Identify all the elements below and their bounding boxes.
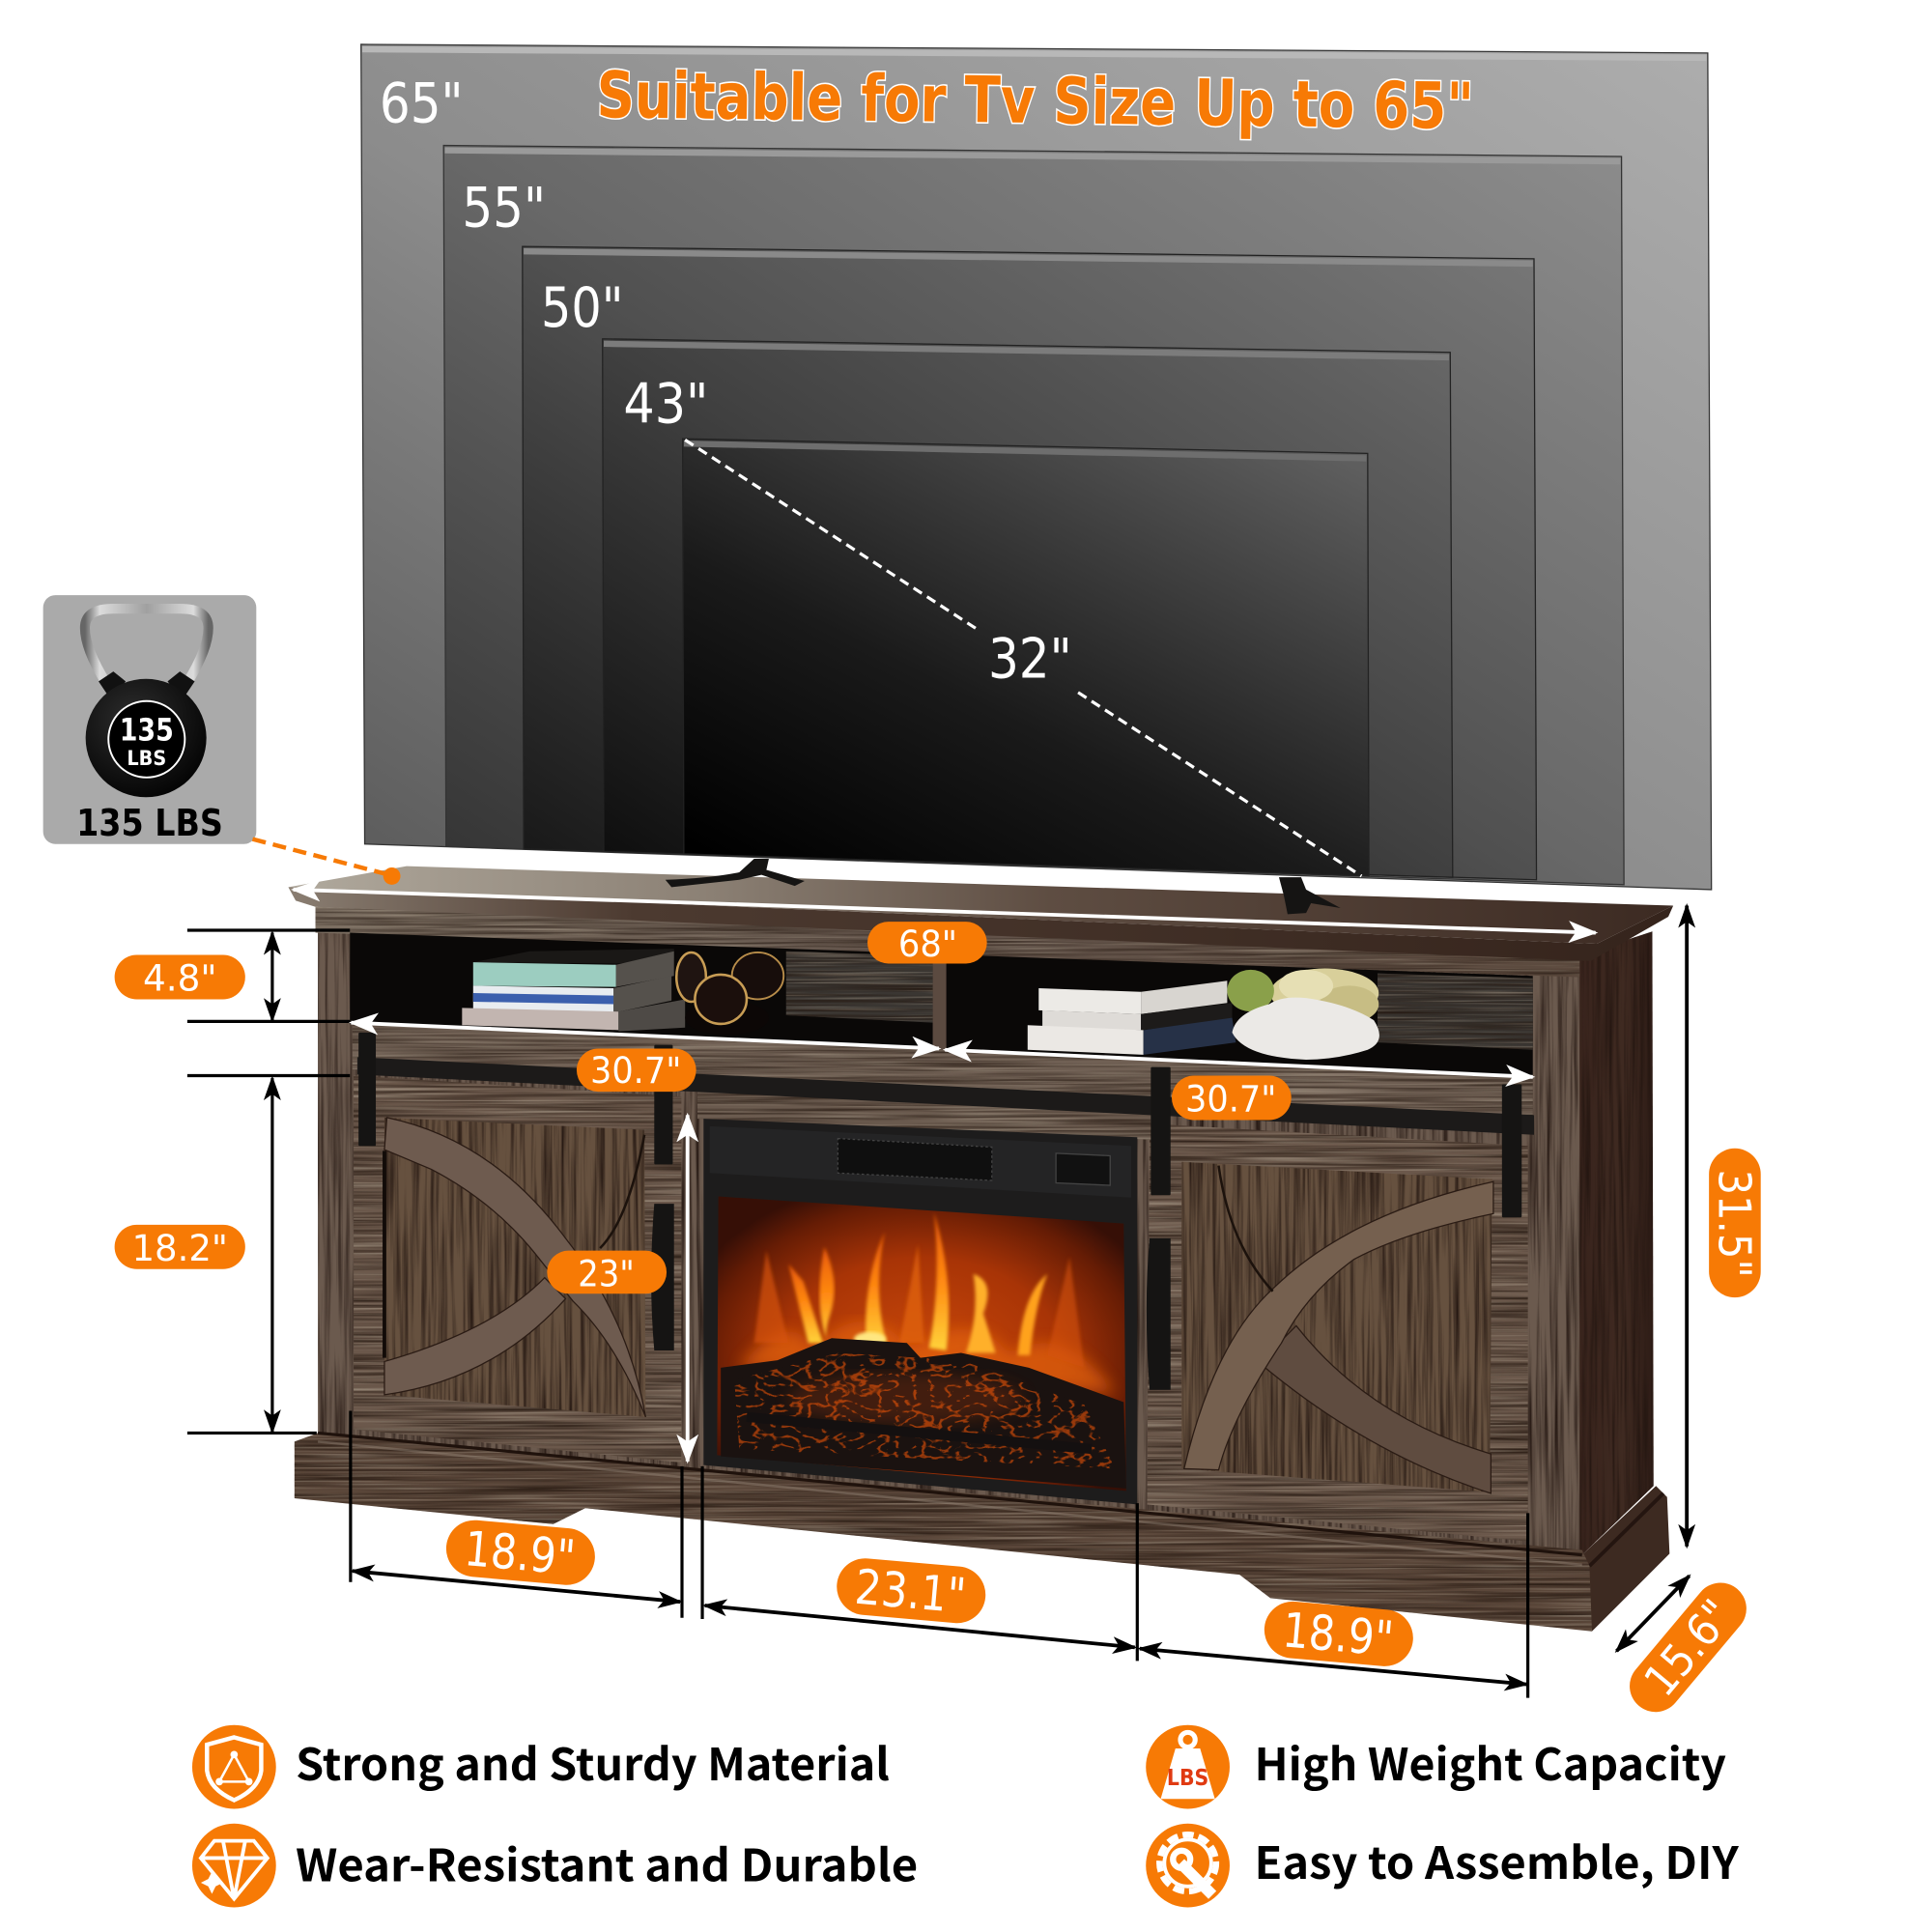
left barn door — [354, 1076, 681, 1463]
badge: 23.1 in: 23.1" — [853, 1559, 968, 1624]
door X brace — [384, 1118, 645, 1417]
32 inch label: 32" — [988, 627, 1072, 692]
card caption: 135 LBS — [76, 802, 223, 845]
TV stand cabinet — [288, 859, 1673, 1632]
right foot — [1279, 877, 1341, 914]
badge: right 18.9 in: 18.9" — [1280, 1602, 1396, 1667]
top surface — [288, 867, 1673, 944]
badge unit: LBS — [127, 747, 166, 771]
shelf opening — [350, 933, 1533, 1076]
flowers — [1270, 969, 1378, 1018]
feature text: wear resistant: Wear-Resistant and Durable — [296, 1832, 918, 1895]
vase — [1233, 998, 1379, 1060]
door frame — [354, 1076, 681, 1463]
door panel — [384, 1118, 645, 1417]
depth arrow — [1616, 1576, 1690, 1651]
base side — [1582, 1486, 1669, 1632]
sliding door rail — [357, 1057, 1534, 1135]
strap brackets — [358, 1033, 376, 1146]
fireplace frame — [703, 1119, 1137, 1504]
icon: weight — [1146, 1725, 1230, 1808]
title: Suitable for Tv Size Up to 65" — [596, 57, 1474, 144]
right door width arrow — [1140, 1649, 1526, 1685]
side panel — [1577, 931, 1654, 1555]
shelf back wall grain left — [786, 952, 933, 1023]
base front — [295, 1433, 1592, 1632]
badge: 15.6 in: 15.6" — [1634, 1589, 1744, 1706]
door height arrow — [271, 1078, 273, 1432]
feature text: strong and sturdy: Strong and Sturdy Material — [296, 1730, 890, 1794]
icon: wrench and gear — [1146, 1824, 1230, 1907]
55 inch screen — [443, 146, 1624, 885]
callout leader line — [252, 839, 401, 885]
badge: 68 in — [867, 922, 987, 965]
left books — [462, 949, 783, 1035]
badge: 18.2 in — [115, 1225, 245, 1269]
white dimension arrows — [294, 890, 1596, 1462]
feature text: easy to assemble: Easy to Assemble, DIY — [1254, 1829, 1739, 1892]
badge: 23 in: 23" — [578, 1254, 635, 1295]
grate — [747, 1417, 1092, 1449]
65 inch screen — [361, 44, 1712, 890]
fireplace width arrow — [705, 1605, 1135, 1647]
left foot — [666, 859, 805, 887]
kettlebell lugs — [99, 671, 195, 699]
badge: 15.6 in — [1619, 1573, 1757, 1723]
fireplace header — [697, 1078, 1151, 1140]
left door width arrow — [353, 1571, 680, 1602]
icon: diamond — [192, 1824, 276, 1907]
glowing embers — [734, 1353, 1115, 1468]
left handle — [651, 1204, 674, 1350]
50 inch screen — [523, 246, 1537, 880]
total height arrow — [1686, 906, 1689, 1547]
badge: 23 in — [547, 1251, 667, 1295]
diagonal dashed line — [685, 440, 1361, 876]
control panel — [710, 1126, 1131, 1198]
right barn door — [1148, 1123, 1528, 1542]
55 inch label: 55" — [462, 176, 546, 241]
door frame — [1148, 1123, 1528, 1542]
shelf height arrow — [271, 933, 273, 1020]
badge: right 30.7 in: 30.7" — [1185, 1079, 1276, 1121]
shelf back wall grain right — [1378, 974, 1533, 1050]
door hardware — [358, 1033, 1521, 1390]
overall width arrow — [294, 890, 1596, 933]
TV feet — [666, 859, 1341, 914]
fireplace — [703, 1119, 1137, 1504]
opening height arrow — [686, 1115, 689, 1462]
heater vent — [838, 1139, 992, 1180]
left shelf arrow — [352, 1023, 939, 1048]
badge number: 135 — [120, 712, 174, 749]
43 inch label: 43" — [623, 371, 708, 436]
right handle — [1147, 1238, 1171, 1390]
weight capacity card — [43, 595, 256, 845]
top front edge — [288, 887, 1673, 961]
43 inch screen — [603, 339, 1453, 877]
badge: 4.8 in: 4.8" — [143, 958, 216, 1000]
badge: 4.8 in — [115, 955, 245, 1000]
flames — [739, 1212, 1115, 1392]
kettlebell badge — [108, 701, 185, 778]
badge: left 30.7 in: 30.7" — [590, 1050, 681, 1092]
right shelf arrow — [945, 1050, 1533, 1077]
feature text: weight capacity: High Weight Capacity — [1254, 1730, 1726, 1794]
badge: left 18.9 in: 18.9" — [462, 1520, 578, 1586]
65 inch label: 65" — [380, 71, 464, 135]
TV size comparison — [361, 44, 1712, 890]
logs — [721, 1338, 1126, 1489]
black dimension lines — [187, 906, 1690, 1698]
door panel — [1181, 1162, 1492, 1492]
front body — [318, 907, 1579, 1555]
door X brace lower — [1260, 1325, 1491, 1493]
icon label: LBS — [1167, 1766, 1208, 1791]
kettlebell handle — [85, 609, 209, 683]
badge: 68 in: 68" — [898, 923, 957, 965]
fire glass — [717, 1197, 1126, 1491]
card background — [43, 595, 256, 844]
50 inch label: 50" — [541, 275, 623, 340]
controls — [1056, 1153, 1110, 1185]
log glow — [788, 1374, 1023, 1423]
right books and vase — [1028, 969, 1379, 1060]
32 inch screen — [683, 439, 1369, 876]
shelf divider — [933, 956, 947, 1050]
crown band — [316, 907, 1579, 977]
badge: 31.5 in: 31.5" — [1708, 1169, 1760, 1278]
door X brace upper — [1184, 1181, 1493, 1470]
sculpture — [685, 1001, 769, 1035]
kettlebell body — [86, 679, 207, 797]
badge: 18.2 in: 18.2" — [131, 1228, 228, 1269]
icon: shield — [192, 1725, 276, 1808]
lower header rail — [353, 1024, 1533, 1123]
